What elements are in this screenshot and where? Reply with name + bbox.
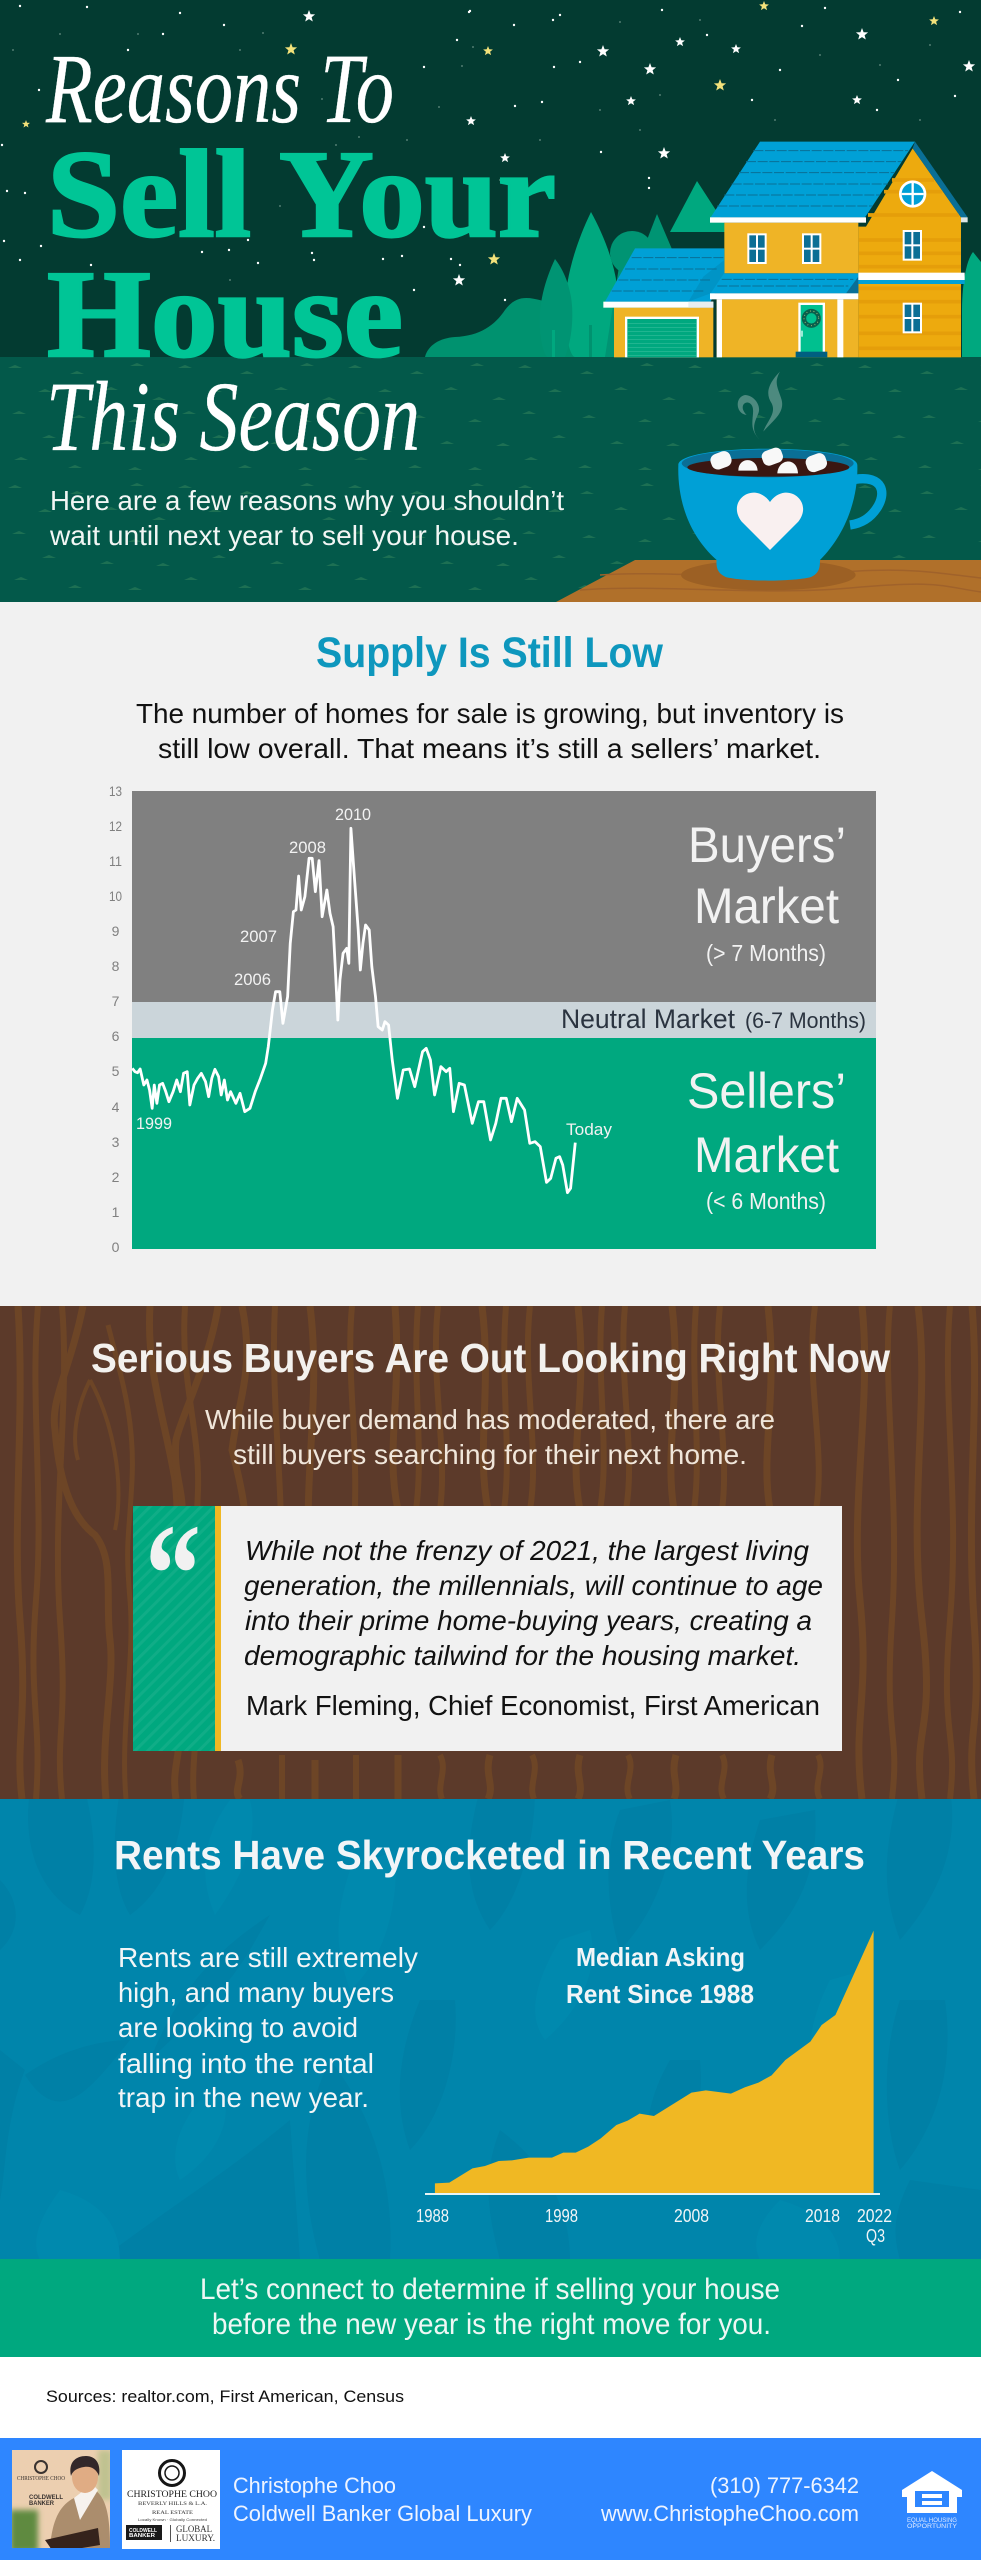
agent hair xyxy=(70,2456,99,2476)
x axis labels: 2008 xyxy=(674,2206,709,2226)
panel: supply is still low xyxy=(0,602,981,1306)
quote text: demographic tailwind for the housing market. xyxy=(244,1640,801,1671)
y axis labels: 9 xyxy=(112,923,120,939)
call to action text: before the new year is the right move for you. xyxy=(212,2308,771,2341)
photo brand xyxy=(29,2494,63,2507)
heading: Serious Buyers Are Out Looking Right Now xyxy=(91,1335,890,1381)
gable wall xyxy=(858,142,968,357)
body text xyxy=(136,698,844,764)
logo trade: REAL ESTATE xyxy=(152,2511,193,2516)
body text: falling into the rental xyxy=(118,2048,374,2079)
year labels: 2010 xyxy=(335,805,371,824)
x axis labels: Q3 xyxy=(866,2226,885,2246)
upper windows xyxy=(747,230,922,341)
y axis labels xyxy=(109,783,122,1255)
neutral market band xyxy=(132,1002,876,1038)
coldwell banker box: COLDWELL xyxy=(129,2528,157,2534)
agent jacket xyxy=(50,2490,110,2548)
chart: months of inventory xyxy=(109,783,876,1255)
y axis labels: 8 xyxy=(112,958,120,974)
wood grain xyxy=(17,1306,976,1799)
agent photo xyxy=(10,2450,112,2552)
contact details: www.ChristopheChoo.com xyxy=(600,2501,859,2526)
agent name and company xyxy=(233,2473,532,2526)
quote stripe panel xyxy=(133,1506,215,1751)
baseline xyxy=(425,2193,880,2195)
buyers market label xyxy=(688,817,846,966)
agent name and company: Christophe Choo xyxy=(233,2473,396,2498)
upper wall and eave xyxy=(710,217,968,273)
body text: are looking to avoid xyxy=(118,2012,358,2043)
call to action text: Let’s connect to determine if selling your house xyxy=(200,2273,780,2306)
chart title xyxy=(566,1942,754,2009)
call to action text xyxy=(200,2273,780,2341)
intro text: Here are a few reasons why you shouldn’t xyxy=(50,485,564,516)
panel: serious buyers xyxy=(0,1306,981,1799)
logo name: CHRISTOPHE CHOO xyxy=(127,2489,218,2499)
panel: rents xyxy=(0,1790,981,2260)
icon: equal housing opportunity: OPPORTUNITY xyxy=(907,2523,958,2530)
neutral market label xyxy=(561,1004,866,1034)
mug bowl xyxy=(678,449,857,566)
panel: sources xyxy=(0,2357,981,2438)
x axis labels: 1988 xyxy=(416,2206,449,2226)
intro text: wait until next year to sell your house. xyxy=(49,520,519,551)
body text: still low overall. That means it’s still a sellers’ market. xyxy=(158,733,821,764)
photo brand: COLDWELL xyxy=(29,2494,63,2501)
body text: high, and many buyers xyxy=(118,1977,394,2008)
body text: still buyers searching for their next home. xyxy=(233,1439,747,1470)
neutral market label: (6-7 Months) xyxy=(745,1008,866,1033)
sources text: Sources: realtor.com, First American, Census xyxy=(46,2387,404,2406)
main roof xyxy=(711,142,915,217)
buyers market band xyxy=(132,791,876,1002)
mug base xyxy=(716,558,820,581)
neutral market label: Neutral Market xyxy=(561,1004,735,1034)
chart: median asking rent xyxy=(416,1931,892,2246)
body text xyxy=(205,1404,775,1470)
title: Sell Your: Sell Your xyxy=(47,126,556,264)
steam xyxy=(738,372,782,440)
title: This Season: This Season xyxy=(46,361,420,472)
icon: equal housing opportunity xyxy=(902,2471,962,2530)
icon: equal housing opportunity: EQUAL HOUSING xyxy=(907,2517,957,2524)
body text: trap in the new year. xyxy=(118,2082,369,2113)
agent folder xyxy=(45,2528,100,2550)
marshmallows xyxy=(710,448,827,474)
buyers market label: (> 7 Months) xyxy=(706,940,826,966)
global luxury: GLOBAL xyxy=(176,2524,212,2534)
porch roof and wall xyxy=(710,273,858,357)
icon: hot cocoa mug xyxy=(678,372,882,590)
intro text xyxy=(49,485,564,551)
body text: While buyer demand has moderated, there are xyxy=(205,1404,775,1435)
icon: house xyxy=(603,142,968,357)
y axis labels: 5 xyxy=(112,1063,120,1079)
panel: hero xyxy=(0,0,981,602)
rent area xyxy=(435,1931,874,2193)
title: Reasons To: Reasons To xyxy=(45,33,394,144)
photo logo ring xyxy=(35,2461,47,2473)
y axis labels: 13 xyxy=(109,783,122,799)
ground xyxy=(0,357,981,602)
year labels: 2007 xyxy=(240,927,277,946)
panel: call to action xyxy=(0,2259,981,2357)
year labels: 1999 xyxy=(136,1114,172,1133)
contact details: (310) 777-6342 xyxy=(710,2473,859,2498)
y axis labels: 10 xyxy=(109,888,122,904)
sellers market label xyxy=(687,1063,846,1214)
x axis labels: 2022 xyxy=(857,2206,892,2226)
y axis labels: 11 xyxy=(109,853,122,869)
y axis labels: 3 xyxy=(112,1134,120,1150)
buyers market label: Buyers’ xyxy=(688,817,846,873)
mug handle xyxy=(850,479,882,525)
quote text: generation, the millennials, will continue to age xyxy=(244,1570,823,1601)
y axis labels: 2 xyxy=(112,1169,120,1185)
heading: Supply Is Still Low xyxy=(316,629,663,677)
body text: Rents are still extremely xyxy=(118,1942,418,1973)
x axis labels: 2018 xyxy=(805,2206,840,2226)
cocoa xyxy=(687,458,849,477)
coldwell banker box xyxy=(126,2525,162,2540)
quote text: into their prime home-buying years, creating a xyxy=(245,1605,812,1636)
y axis labels: 7 xyxy=(112,993,120,1009)
agent face xyxy=(72,2466,98,2493)
logo divider xyxy=(170,2525,171,2542)
mug interior xyxy=(682,449,854,477)
coldwell banker box: BANKER xyxy=(129,2533,155,2539)
heading: Rents Have Skyrocketed in Recent Years xyxy=(114,1832,865,1878)
middle band xyxy=(858,273,965,284)
sellers market label: (< 6 Months) xyxy=(706,1188,826,1214)
heart xyxy=(737,493,803,550)
chart title: Median Asking xyxy=(576,1942,745,1972)
year labels: 2008 xyxy=(289,838,326,857)
y axis labels: 1 xyxy=(112,1204,120,1220)
sellers market label: Sellers’ xyxy=(687,1063,846,1119)
y axis labels: 12 xyxy=(109,818,122,834)
photo name: CHRISTOPHE CHOO xyxy=(17,2476,66,2482)
round gable window xyxy=(899,180,926,208)
logo card xyxy=(122,2450,220,2549)
sellers market band xyxy=(132,1038,876,1249)
buyers market label: Market xyxy=(694,878,839,934)
logo tagline: Locally Known · Globally Connected xyxy=(138,2517,207,2522)
agent name and company: Coldwell Banker Global Luxury xyxy=(233,2501,532,2526)
y axis labels: 0 xyxy=(112,1239,120,1255)
mug shadow xyxy=(681,562,856,590)
leaf pattern xyxy=(0,1790,981,2260)
body text: The number of homes for sale is growing, but inventory is xyxy=(136,698,844,729)
inventory line xyxy=(132,828,575,1193)
x axis labels: 1998 xyxy=(545,2206,578,2226)
garage xyxy=(603,248,724,357)
year labels: 2006 xyxy=(234,970,271,989)
front door with wreath xyxy=(796,303,827,357)
agent shirt xyxy=(74,2484,98,2520)
year labels: Today xyxy=(566,1120,612,1139)
chart title: Rent Since 1988 xyxy=(566,1979,754,2009)
logo ring xyxy=(160,2460,184,2486)
night stars xyxy=(2,1,975,330)
x axis labels xyxy=(416,2206,892,2246)
photo brand: BANKER xyxy=(29,2500,54,2507)
y axis labels: 6 xyxy=(112,1028,120,1044)
body text xyxy=(118,1942,418,2113)
sellers market label: Market xyxy=(694,1127,839,1183)
year labels xyxy=(136,805,612,1139)
y axis labels: 4 xyxy=(112,1099,120,1115)
trees and bushes behind the house xyxy=(425,181,981,357)
title: House: House xyxy=(47,246,403,384)
attribution: Mark Fleming, Chief Economist, First American xyxy=(246,1690,820,1721)
icon: quotation mark: “ xyxy=(145,1495,201,1655)
quote text xyxy=(244,1535,823,1671)
quote text: While not the frenzy of 2021, the largest living xyxy=(245,1535,809,1566)
global luxury: LUXURY. xyxy=(176,2533,215,2543)
contact details xyxy=(600,2473,859,2526)
yellow accent xyxy=(215,1506,221,1751)
global luxury xyxy=(176,2524,215,2543)
logo location: BEVERLY HILLS & L.A. xyxy=(138,2502,207,2507)
panel: footer xyxy=(0,2438,981,2560)
quote box xyxy=(133,1495,842,1751)
table xyxy=(556,560,981,602)
